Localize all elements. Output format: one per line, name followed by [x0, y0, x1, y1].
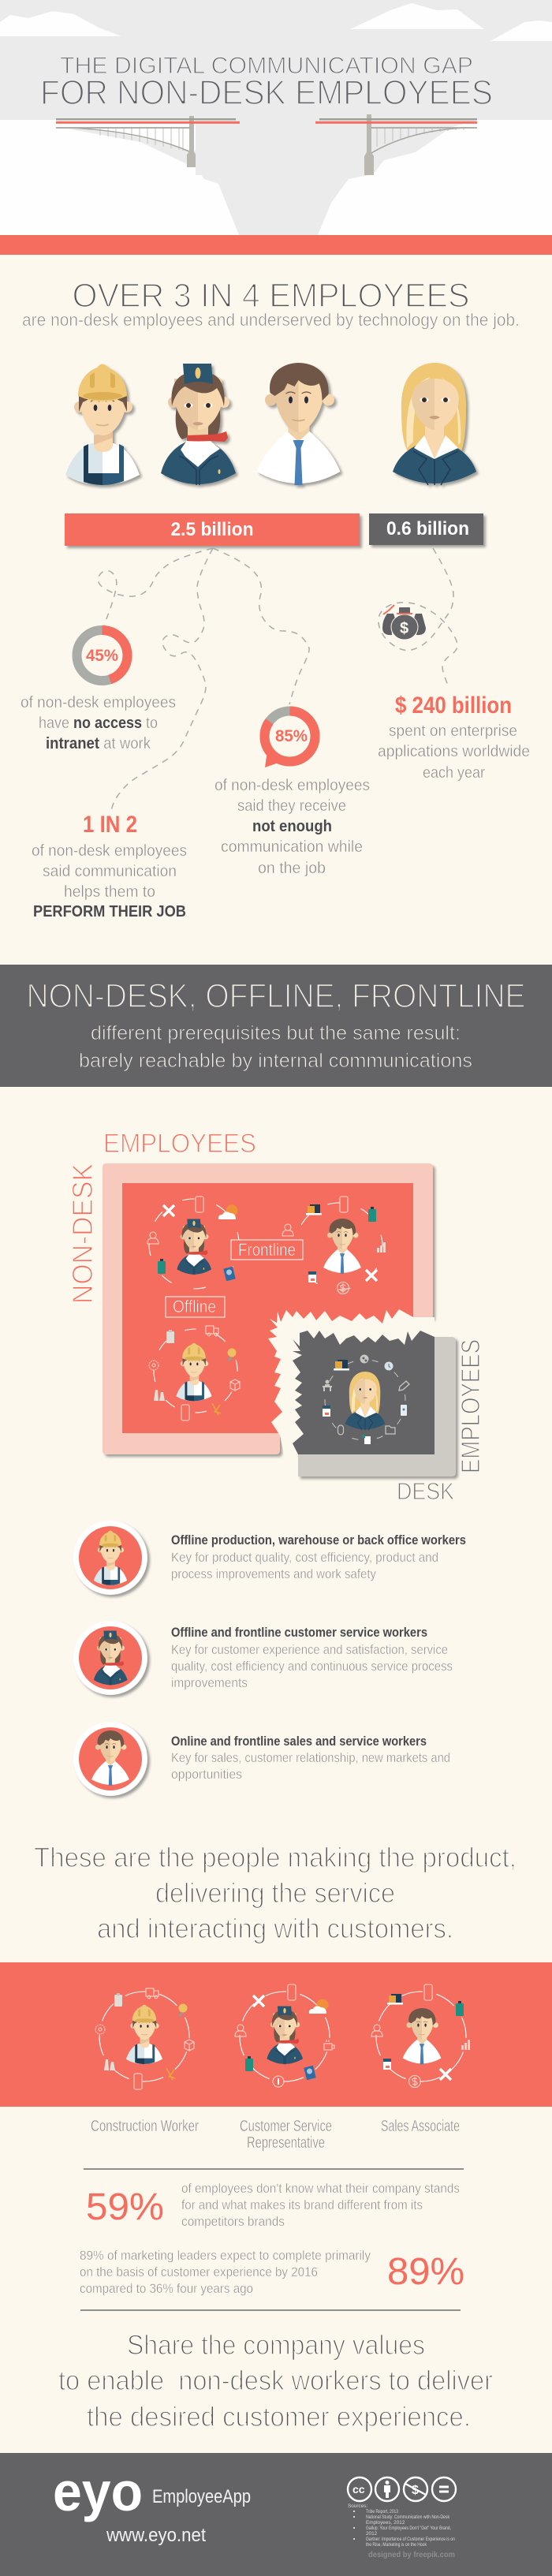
stat: 45 percent — [21, 630, 176, 752]
icon: sales man — [257, 363, 341, 485]
ring: stewardess — [132, 1182, 255, 1305]
icon: money bags — [382, 605, 426, 640]
statement: share the company values: the desired customer experience. — [87, 2402, 471, 2432]
stat: 89 percent: 89% of marketing leaders expect to complete primarily — [80, 2248, 371, 2263]
label: frontline: Frontline — [238, 1240, 296, 1260]
icons: creative commons: cc — [352, 2483, 365, 2496]
stat: 240 billion: each year — [423, 764, 485, 782]
stat: 1 in 2: said communication — [43, 863, 177, 880]
stat: 89 percent — [80, 2248, 464, 2296]
canyon shading — [67, 120, 447, 175]
sources: Sources: — [348, 2503, 367, 2509]
red band — [0, 235, 552, 255]
stat: 89 percent: 89% — [387, 2251, 464, 2293]
heading: over 3 in 4: are non-desk employees and underserved by technology on the job. — [22, 310, 520, 330]
stat: 240 billion: applications worldwide — [378, 743, 530, 760]
label: desk: DESK — [397, 1477, 454, 1505]
stat: 1 in 2: helps them to — [64, 883, 155, 901]
sources: the Rise, Marketing is on the Hook — [366, 2542, 427, 2548]
panel: red band of roles — [0, 1962, 552, 2107]
icons: creative commons — [348, 2477, 456, 2501]
sources: National Study: Communication with Non-Desk — [366, 2514, 450, 2520]
ring: sales man — [280, 1187, 398, 1305]
role labels: Construction Worker — [91, 2118, 199, 2135]
credit: freepik: designed by freepik.com — [368, 2550, 455, 2559]
title: FOR NON-DESK EMPLOYEES — [40, 73, 493, 112]
item: offline production: Offline production, warehouse or back office workers — [171, 1533, 466, 1547]
heading: over 3 in 4 — [22, 277, 520, 330]
speech bubble donut: 85% — [265, 711, 315, 767]
stat: 89 percent: compared to 36% four years ago — [80, 2281, 253, 2296]
list: worker types — [73, 1521, 466, 1796]
item: customer service — [73, 1621, 453, 1695]
sources: 2012 — [366, 2531, 378, 2537]
sources: Gartner: Importance of Customer Experience is on — [366, 2537, 455, 2542]
stat: 59 percent: of employees don't know what their company stands — [181, 2181, 460, 2196]
logo: eyo: eyo — [53, 2461, 143, 2522]
stat: 45 percent: have no access to — [39, 715, 158, 732]
stat: 45 percent: of non-desk employees — [21, 694, 176, 711]
item: sales and service — [73, 1722, 450, 1796]
statement: share the company values: to enable non-desk workers to deliver — [58, 2365, 493, 2396]
icon: stewardess — [161, 364, 236, 485]
stat: 85 percent: of non-desk employees — [214, 777, 370, 794]
item: customer service: improvements — [171, 1675, 248, 1690]
label: employees desk: EMPLOYEES — [456, 1339, 485, 1473]
title: THE DIGITAL COMMUNICATION GAP — [60, 53, 473, 79]
torn edge — [268, 1309, 435, 1454]
stat: 85 percent: communication while — [221, 838, 363, 856]
statement: share the company values — [58, 2330, 493, 2432]
statement: share the company values: Share the company values — [127, 2330, 425, 2361]
stat: 1 in 2 — [32, 812, 187, 920]
item: customer service: Offline and frontline customer service workers — [171, 1625, 427, 1640]
statement: people making the product: delivering the service — [155, 1878, 395, 1909]
text: url: www.eyo.net — [106, 2525, 206, 2546]
ring: sales associate — [364, 1979, 479, 2094]
stat: 59 percent — [86, 2181, 460, 2229]
bar: 2.5 billion: 2.5 billion — [170, 519, 254, 540]
item: sales and service: opportunities — [171, 1767, 242, 1782]
stat: 1 in 2: PERFORM THEIR JOB — [33, 903, 186, 920]
chart: employee quadrant — [66, 1129, 485, 1505]
bridge left — [56, 116, 240, 167]
label: offline: Offline — [173, 1297, 216, 1316]
role labels — [91, 2118, 460, 2152]
stat: 89 percent: on the basis of customer experience by 2016 — [80, 2264, 318, 2279]
stat: 240 billion: $ 240 billion — [395, 693, 512, 719]
stat: 85 percent: said they receive — [237, 797, 346, 815]
stat: 85 percent — [214, 711, 370, 877]
ring: office woman — [319, 1354, 411, 1446]
icons: creative commons: $ — [412, 2484, 419, 2497]
statement: people making the product: These are the people making the product, — [34, 1842, 517, 1873]
cliffs — [0, 120, 552, 235]
item: offline production: process improvements and work safety — [171, 1566, 376, 1581]
stat: 45 percent: intranet at work — [46, 735, 151, 752]
panel: desk inner — [293, 1331, 435, 1454]
bar: 0.6 billion — [369, 513, 483, 545]
item: offline production: Key for product quality, cost efficiency, product and — [171, 1550, 438, 1565]
title — [40, 53, 493, 112]
role labels: Sales Associate — [381, 2118, 460, 2135]
icon: money bags: $ — [400, 620, 408, 637]
ring: worker — [139, 1314, 252, 1428]
panel: non-desk offline frontline banner — [0, 965, 552, 1087]
sources: Tribe Report, 2013 — [366, 2509, 398, 2514]
panel: non-desk offline frontline banner: different prerequisites but the same result: — [91, 1022, 461, 1044]
statement: people making the product: and interacting with customers. — [97, 1913, 453, 1944]
speech bubble donut: 85%: 85% — [275, 727, 308, 745]
stat: 240 billion — [378, 605, 530, 782]
stat: 59 percent: for and what makes its brand different from its — [181, 2197, 423, 2212]
heading: over 3 in 4: OVER 3 IN 4 EMPLOYEES — [73, 277, 470, 315]
sources — [348, 2503, 455, 2548]
panel: desk outer frame — [298, 1337, 456, 1477]
panel: non-desk inner — [122, 1183, 413, 1433]
stat: 85 percent: not enough — [252, 818, 332, 835]
ring: construction worker — [87, 1979, 202, 2094]
statement: people making the product — [34, 1842, 517, 1944]
text: employee app: EmployeeApp — [152, 2486, 251, 2507]
item: offline production — [73, 1521, 466, 1595]
item: sales and service: Key for sales, customer relationship, new markets and — [171, 1750, 450, 1765]
stat: 59 percent: competitors brands — [181, 2214, 285, 2229]
icon: office woman — [393, 363, 476, 485]
role labels: Customer Service — [240, 2118, 332, 2135]
donut chart: 45%: 45% — [86, 647, 118, 665]
sources: Gallup: Your Employees Don't "Get" Your Brand, — [366, 2526, 451, 2531]
panel: non-desk outer frame — [103, 1163, 433, 1454]
stat: 240 billion: spent on enterprise — [389, 722, 517, 740]
stat: 85 percent: on the job — [258, 860, 326, 877]
stat: 1 in 2: of non-desk employees — [32, 842, 187, 860]
people row — [65, 363, 476, 485]
panel: footer — [0, 2453, 552, 2576]
bridge right — [315, 114, 477, 175]
label: employees non-desk: EMPLOYEES — [103, 1129, 256, 1159]
donut chart: 45% — [77, 630, 128, 681]
panel: header — [0, 0, 552, 237]
item: sales and service: Online and frontline sales and service workers — [171, 1734, 427, 1749]
label: non-desk: NON-DESK — [66, 1163, 99, 1304]
stat: 1 in 2: 1 IN 2 — [83, 812, 137, 838]
bar: 0.6 billion: 0.6 billion — [386, 518, 469, 539]
clouds — [0, 3, 552, 41]
panel: non-desk offline frontline banner: barely reachable by internal communications — [79, 1050, 472, 1072]
bar: 2.5 billion — [65, 513, 360, 546]
item: customer service: quality, cost efficiency and continuous service process — [171, 1659, 453, 1674]
sources: Employees, 2012 — [366, 2520, 405, 2526]
icon: construction worker — [65, 364, 140, 485]
ring: customer service — [227, 1979, 342, 2094]
role labels: Representative — [247, 2134, 325, 2152]
item: customer service: Key for customer experience and satisfaction, service — [171, 1642, 448, 1657]
stat: 59 percent: 59% — [86, 2186, 164, 2228]
dashed connectors — [98, 548, 457, 811]
